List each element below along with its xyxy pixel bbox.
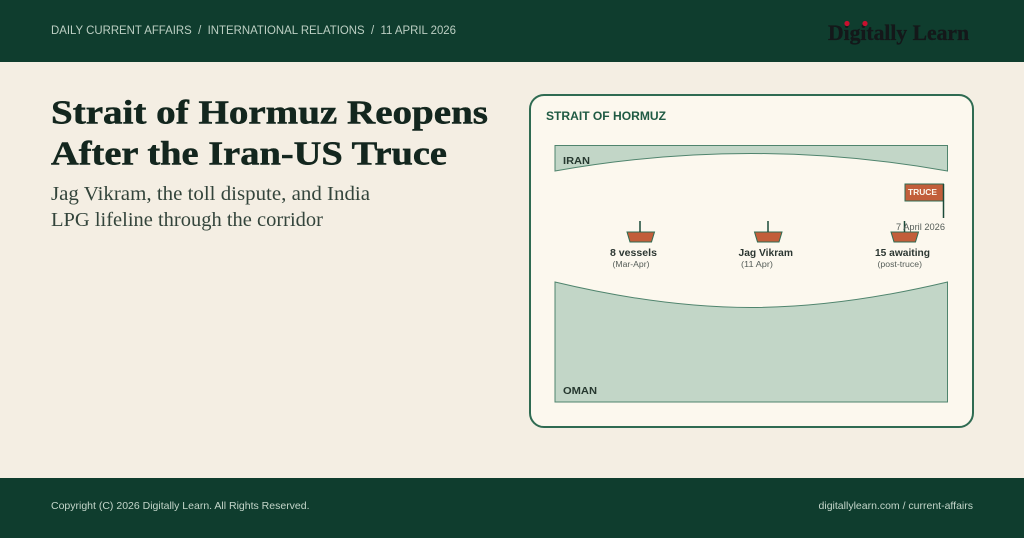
breadcrumb: DAILY CURRENT AFFAIRS / INTERNATIONAL RELATIONS / 11 APRIL 2026	[51, 25, 456, 37]
truce flag: TRUCE	[908, 188, 938, 197]
subtitle: LPG lifeline through the corridor	[51, 210, 324, 231]
header band	[0, 0, 1024, 62]
panel: strait map	[529, 94, 974, 428]
land: Oman	[555, 282, 948, 402]
ship: Jag Vikram: (11 Apr)	[741, 260, 773, 269]
panel heading: STRAIT OF HORMUZ	[546, 111, 666, 123]
land: Iran	[555, 146, 948, 171]
website: digitallylearn.com / current-affairs	[819, 500, 973, 512]
ship: 8 vessels: 8 vessels	[610, 248, 657, 259]
truce flag	[905, 184, 944, 218]
ship: 15 awaiting: (post-truce)	[878, 260, 922, 269]
ship: 8 vessels: (Mar-Apr)	[612, 260, 650, 269]
footer band	[0, 478, 1024, 538]
logo: Digitally Learn	[828, 20, 969, 45]
land: Iran: IRAN	[563, 155, 590, 167]
ship: Jag Vikram	[738, 221, 793, 269]
subtitle	[51, 184, 370, 231]
subtitle: Jag Vikram, the toll dispute, and India	[51, 184, 370, 205]
ship: 15 awaiting	[875, 221, 930, 269]
title	[51, 94, 488, 172]
title: Strait of Hormuz Reopens	[51, 94, 488, 132]
truce date: 7 April 2026	[896, 222, 945, 232]
copyright: Copyright (C) 2026 Digitally Learn. All Rights Reserved.	[51, 500, 310, 512]
ship: Jag Vikram: Jag Vikram	[738, 248, 793, 259]
ship: 15 awaiting: 15 awaiting	[875, 248, 930, 259]
ship: 8 vessels	[610, 221, 657, 269]
land: Oman: OMAN	[563, 385, 597, 397]
title: After the Iran-US Truce	[51, 136, 447, 172]
